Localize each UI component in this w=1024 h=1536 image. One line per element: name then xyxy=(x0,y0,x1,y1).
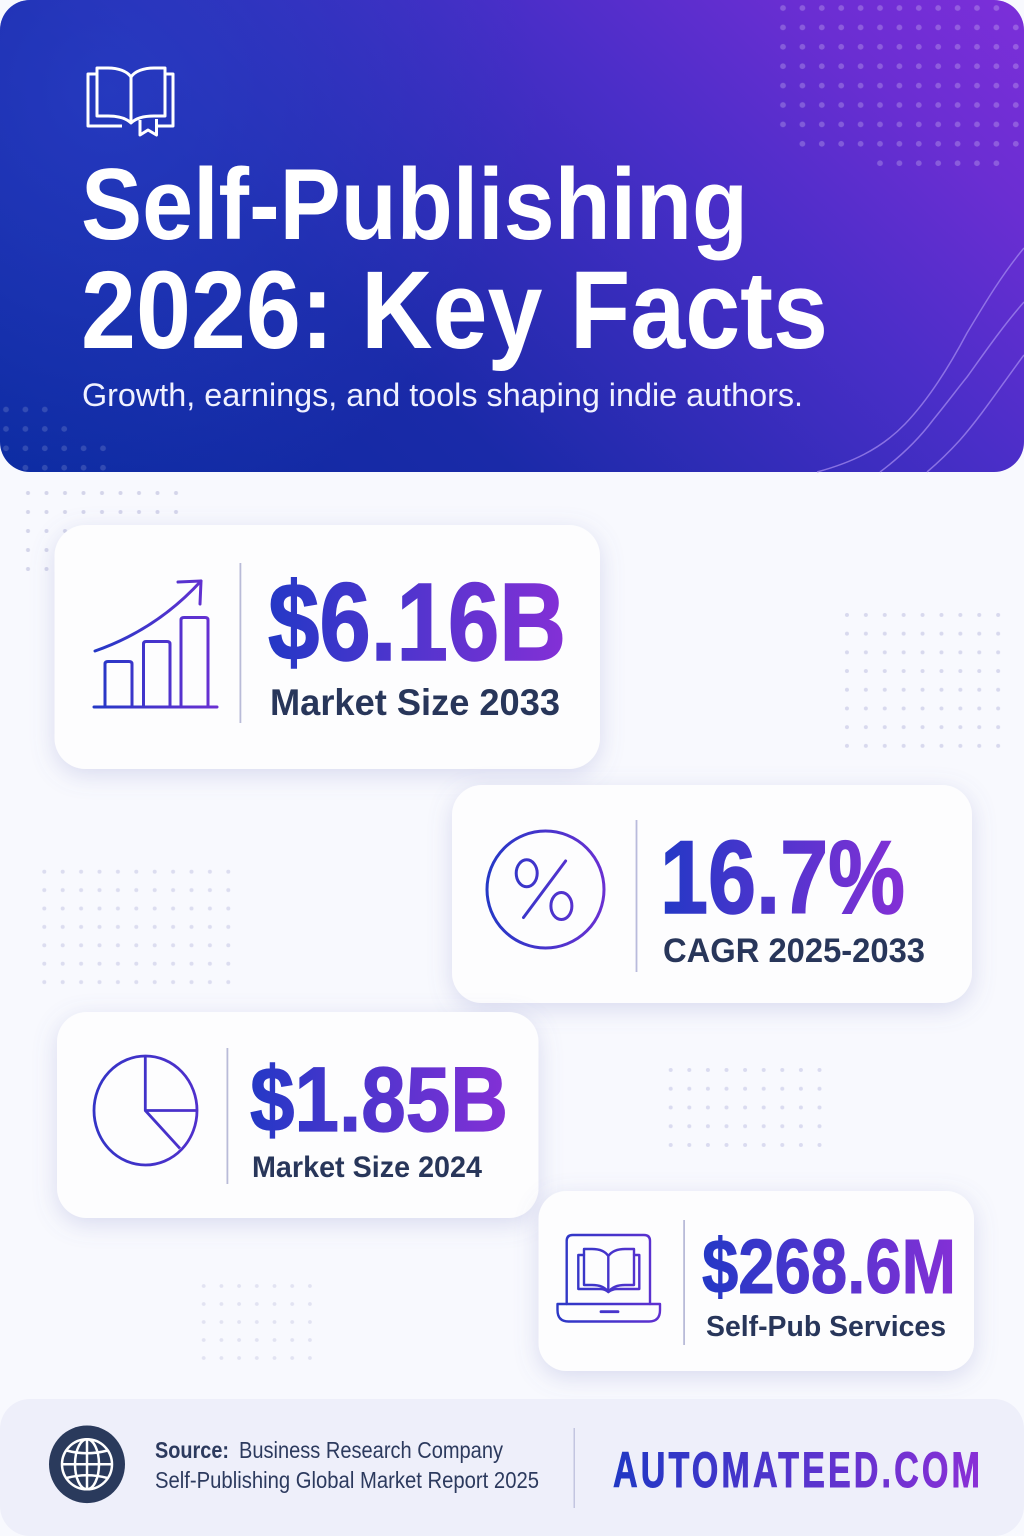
title: 2026: Key Facts xyxy=(81,249,828,372)
source text: Self-Publishing Global Market Report 2025 xyxy=(155,1467,539,1493)
panel: self-pub services card xyxy=(538,1191,974,1371)
dot pattern: top right xyxy=(775,0,1024,172)
title: Self-Publishing xyxy=(81,149,748,261)
source text: Source: xyxy=(155,1437,229,1463)
dot pattern: bottom left xyxy=(0,400,113,472)
source text xyxy=(155,1437,539,1493)
decorative wave lines xyxy=(817,248,1024,472)
panel: market size 2033 card xyxy=(54,525,600,769)
icon: globe xyxy=(49,1426,125,1503)
divider xyxy=(240,563,241,723)
label: CAGR 2025-2033 xyxy=(663,932,925,970)
divider xyxy=(574,1428,575,1508)
label: Market Size 2024 xyxy=(252,1151,482,1184)
panel: market size 2024 card xyxy=(57,1012,538,1218)
label: Self-Pub Services xyxy=(706,1311,946,1343)
value: $1.85B xyxy=(250,1049,508,1151)
panel: CAGR card xyxy=(452,785,972,1003)
icon: open book with bookmark xyxy=(88,68,173,135)
value: $268.6M xyxy=(702,1224,956,1310)
divider xyxy=(683,1220,685,1345)
title xyxy=(81,149,828,372)
panel: header banner xyxy=(0,0,1024,472)
icon: pie chart xyxy=(94,1056,197,1165)
value: 16.7% xyxy=(660,820,905,936)
icon: rising bar chart xyxy=(94,581,217,707)
icon: laptop with book xyxy=(558,1235,660,1322)
divider xyxy=(226,1048,228,1184)
subtitle: Growth, earnings, and tools shaping indie authors. xyxy=(82,377,803,413)
divider xyxy=(636,820,637,972)
background dot fields xyxy=(19,484,1008,1367)
panel: footer xyxy=(0,1399,1024,1536)
source text: Business Research Company xyxy=(239,1437,503,1463)
icon: percent in circle xyxy=(487,831,604,948)
value: $6.16B xyxy=(268,561,566,684)
label: Market Size 2033 xyxy=(270,682,560,723)
